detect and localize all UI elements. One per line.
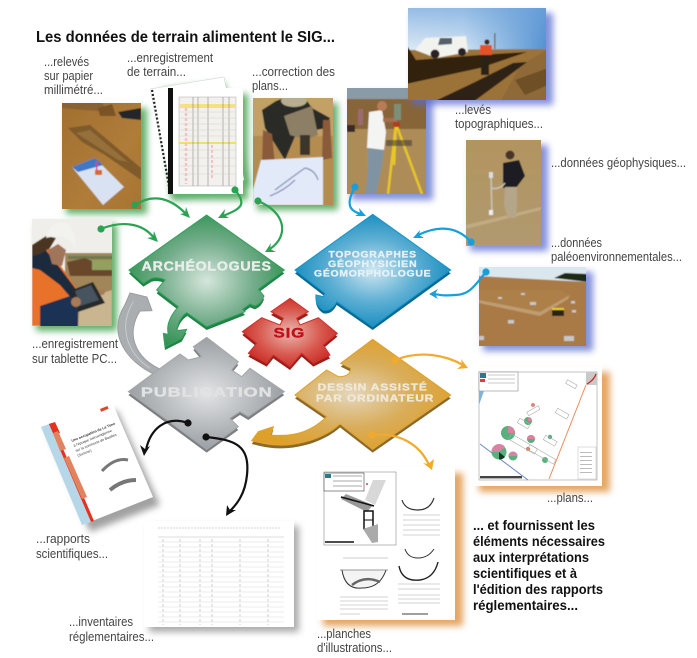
report text: à l'époque mérovingienne bbox=[73, 429, 112, 448]
piece: archéologues bbox=[129, 215, 284, 350]
photo: enregistrement de terrain bbox=[150, 77, 250, 200]
piece: dessin assisté par ordinateur: DESSIN ASSISTÉ bbox=[318, 380, 428, 393]
piece: topographes: GÉOMORPHOLOGUE bbox=[314, 269, 431, 279]
text: levés topographiques: topographiques... bbox=[455, 116, 543, 131]
text: conclusion: l'édition des rapports bbox=[473, 581, 603, 597]
report text: (Somme) bbox=[77, 449, 92, 458]
piece: publication bbox=[128, 337, 284, 453]
text: inventaires réglementaires: réglementaires... bbox=[69, 629, 154, 644]
piece: topographes: GÉOPHYSICIEN bbox=[328, 259, 417, 269]
text: enregistrement sur tablette PC bbox=[32, 336, 118, 366]
piece: publication arrow bbox=[118, 293, 165, 375]
text: planches d'illustrations bbox=[317, 626, 392, 655]
text: relevés sur papier millimétré bbox=[44, 54, 103, 97]
report text: sur la commune de Basilles bbox=[75, 433, 117, 453]
text: inventaires réglementaires: ...inventaires bbox=[69, 614, 133, 629]
front page bbox=[168, 88, 243, 194]
photo: inventaires réglementaires bbox=[144, 521, 299, 632]
text: rapports scientifiques bbox=[36, 531, 108, 561]
title: Les données de terrain alimentent le SIG... bbox=[36, 29, 335, 46]
photo: rapports scientifiques bbox=[41, 402, 160, 532]
text: enregistrement de terrain: ...enregistrement bbox=[127, 50, 213, 65]
chart: pie charts on map bbox=[491, 403, 552, 463]
text: données paléoenvironnementales: ...données bbox=[551, 235, 602, 250]
photo: données géophysiques bbox=[464, 138, 548, 251]
photo: levés au tachéomètre bbox=[345, 86, 433, 200]
photo: planches d'illustrations bbox=[317, 467, 463, 626]
puzzle: central diagram bbox=[118, 214, 451, 453]
text: données paléoenvironnementales bbox=[551, 235, 682, 264]
text: rapports scientifiques: scientifiques... bbox=[36, 546, 108, 561]
text: relevés sur papier millimétré: sur papier bbox=[44, 68, 94, 83]
text: correction des plans: plans... bbox=[252, 78, 288, 93]
text: inventaires réglementaires bbox=[69, 614, 154, 644]
report text: Une occupation de La Tène bbox=[71, 422, 116, 443]
text: conclusion: scientifiques et à bbox=[473, 565, 577, 581]
text: conclusion: réglementaires... bbox=[473, 597, 578, 613]
back page bbox=[150, 77, 244, 194]
piece: SIG bbox=[242, 298, 337, 370]
text: plans: ...plans... bbox=[547, 490, 593, 505]
text: enregistrement de terrain: de terrain... bbox=[127, 64, 186, 79]
piece: SIG: SIG bbox=[273, 325, 305, 341]
arrows: orange bbox=[368, 355, 468, 470]
text: rapports scientifiques: ...rapports bbox=[36, 531, 90, 546]
text: enregistrement de terrain bbox=[127, 50, 213, 79]
text: conclusion: éléments nécessaires bbox=[473, 533, 605, 549]
photo: correction des plans bbox=[251, 95, 338, 210]
photo: plans bbox=[473, 367, 610, 492]
text: conclusion: ... et fournissent les bbox=[473, 517, 595, 533]
text: relevés sur papier millimétré: millimétré... bbox=[44, 82, 103, 97]
text: enregistrement sur tablette PC: sur tablette PC... bbox=[32, 351, 117, 366]
text: planches d'illustrations: d'illustrations... bbox=[317, 640, 392, 655]
photo: enregistrement sur tablette PC bbox=[30, 217, 117, 331]
text: correction des plans bbox=[252, 64, 335, 93]
text: correction des plans: ...correction des bbox=[252, 64, 335, 79]
arrows: blue bbox=[350, 183, 490, 299]
text: conclusion bbox=[473, 517, 605, 613]
text: levés topographiques: ...levés bbox=[455, 102, 491, 117]
text: levés topographiques bbox=[455, 102, 543, 131]
photo: relevés sur papier millimétré bbox=[60, 101, 147, 214]
arrows: black bbox=[140, 419, 247, 516]
text: planches d'illustrations: ...planches bbox=[317, 626, 371, 641]
photo: levés topographiques bbox=[406, 6, 553, 105]
photo: données paléoenvironnementales bbox=[477, 265, 593, 351]
arrows: green bbox=[97, 186, 282, 252]
report text bbox=[71, 422, 117, 458]
text: conclusion: aux interprétations bbox=[473, 549, 589, 565]
text: enregistrement sur tablette PC: ...enregistrement bbox=[32, 336, 118, 351]
piece: topographes: TOPOGRAPHES bbox=[328, 249, 417, 259]
piece: archéologues: ARCHÉOLOGUES bbox=[142, 259, 272, 274]
text: relevés sur papier millimétré: ...relevés bbox=[44, 54, 89, 69]
piece: dessin assisté par ordinateur bbox=[252, 339, 451, 453]
piece: topographes bbox=[295, 214, 451, 330]
piece: publication: PUBLICATION bbox=[141, 384, 272, 399]
piece: dessin assisté par ordinateur: PAR ORDINATEUR bbox=[316, 393, 434, 404]
